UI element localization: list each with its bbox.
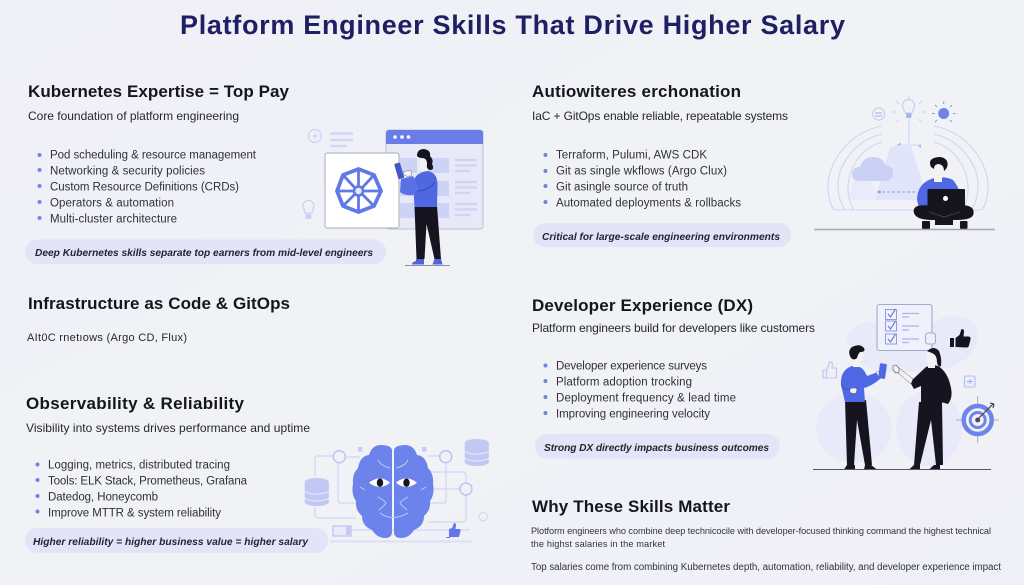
subheading: developer experience: Platform engineers build for developers like customers [532,321,815,335]
heading: why these skills matter: Why These Skills Matter [532,497,730,516]
bullet list: automation: Automated deployments & rollbacks [556,198,741,210]
callout: developer experience [535,434,780,458]
text: workflows: AIt0C rnetıows (Argo CD, Flux) [27,332,187,344]
bullet list: automation: Git as single wkflows (Argo Clux) [556,166,727,178]
heading: observability: Observability & Reliability [26,394,245,413]
bullet list: observability [36,460,248,520]
illustration: two developers with checklist and target [813,304,999,470]
callout: developer experience: Strong DX directly impacts business outcomes [544,443,769,454]
callout: observability: Higher reliability = higher business value = higher salary [33,537,309,548]
bullet list: Kubernetes [38,150,257,226]
bullet list: observability: Improve MTTR & system reliability [48,508,221,520]
heading: automation: Autiowiteres erchonation [532,82,741,101]
bullet list: observability: Logging, metrics, distributed tracing [48,460,230,472]
bullet list: Kubernetes: Custom Resource Definitions (CRDs) [50,182,239,194]
callout: Kubernetes: Deep Kubernetes skills separate top earners from mid-level engineers [35,248,373,259]
callout: automation [533,223,791,247]
panel: Kubernetes expertise [25,82,483,266]
bullet list: developer experience: Improving engineering velocity [556,408,710,420]
panel: why these skills matter [531,497,1001,573]
illustration: person on laptop with cloud and arches [814,96,995,230]
bullet list: Kubernetes: Networking & security policies [50,166,205,178]
bullet list: developer experience [544,360,736,420]
title: Platform Engineer Skills That Drive Higher Salary [180,10,845,40]
bullet list: automation [544,150,741,210]
bullet list: developer experience: Platform adoption trocking [556,376,692,388]
subheading: automation: IaC + GitOps enable reliable, repeatable systems [532,109,788,123]
bullet list: automation: Terraform, Pulumi, AWS CDK [556,150,707,162]
bullet list: Kubernetes: Multi-cluster architecture [50,214,177,226]
panel: observability [25,394,489,553]
heading: Kubernetes: Kubernetes Expertise = Top Pay [28,82,290,101]
bullet list: automation: Git asingle source of truth [556,182,688,194]
callout: observability [25,528,328,553]
panel: developer experience [532,296,999,470]
panel: automation [532,82,995,247]
text block: why paragraph two: Top salaries come from combining Kubernetes depth, automation, reliability, and developer experience impact [531,562,1001,573]
bullet list: developer experience: Developer experience surveys [556,360,707,372]
subheading: observability: Visibility into systems drives performance and uptime [26,421,310,435]
panel: infrastructure as code [27,294,290,344]
illustration: woman with Kubernetes card and browser window [303,130,483,266]
bullet list: Kubernetes: Operators & automation [50,198,174,210]
text block: why paragraph one [531,526,991,549]
bullet list: observability: Datedog, Honeycomb [48,492,158,504]
bullet list: observability: Tools: ELK Stack, Prometheus, Grafana [48,476,248,488]
callout: automation: Critical for large-scale engineering environments [542,232,780,243]
illustration: brain with circuit and databases [304,438,489,542]
bullet list: developer experience: Deployment frequency & lead time [556,392,736,404]
subheading: Kubernetes: Core foundation of platform engineering [28,109,239,123]
heading: infrastructure as code: Infrastructure as Code & GitOps [28,294,290,313]
text block: why paragraph one: the highst salaries in the market [531,539,665,549]
text block: why paragraph one: Plotform engineers who combine deep technicocile with developer-focused thinking command the highest technical [531,526,991,536]
bullet list: Kubernetes: Pod scheduling & resource management [50,150,257,162]
heading: developer experience: Developer Experience (DX) [532,296,753,315]
callout: Kubernetes [25,240,386,264]
